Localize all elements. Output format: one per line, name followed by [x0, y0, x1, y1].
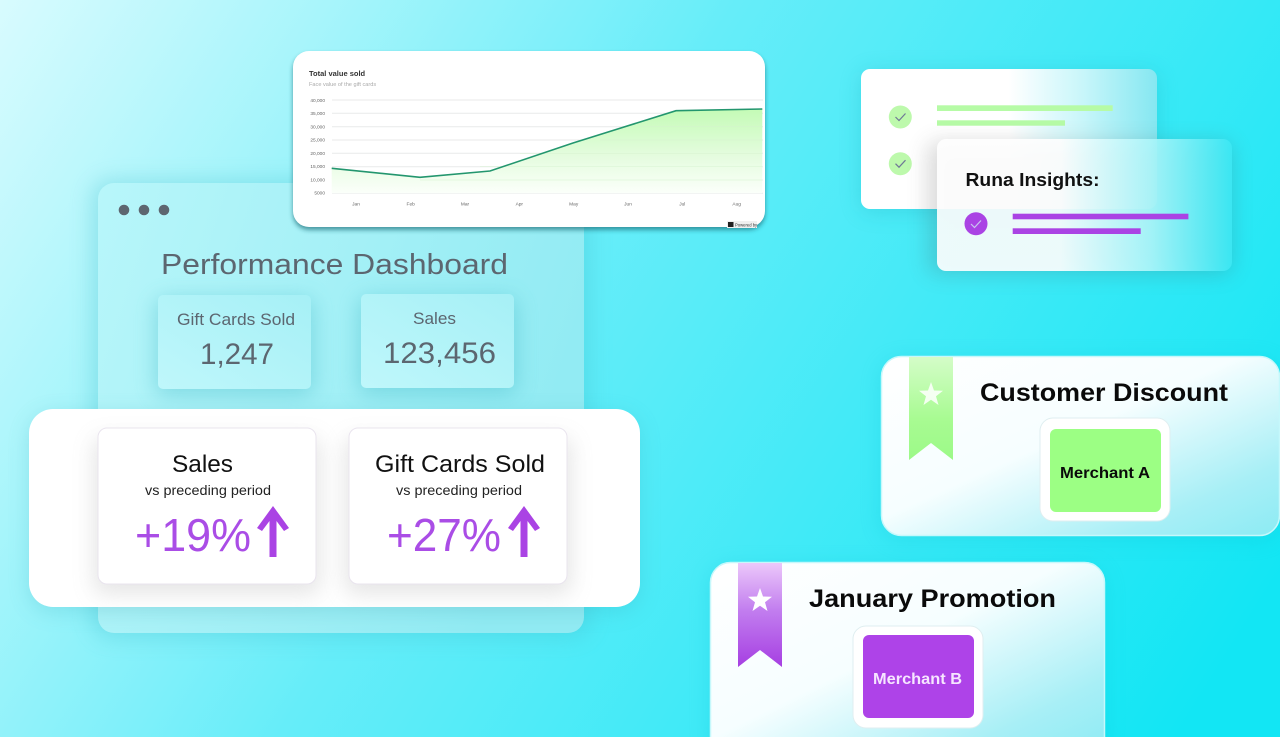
stat card: gift cards sold: 1,247	[200, 338, 274, 371]
panel: total value sold chart	[293, 51, 765, 230]
x axis labels: Apr	[516, 202, 523, 208]
panel: customer discount card	[881, 356, 1280, 540]
metric card: gift cards sold	[345, 428, 571, 594]
y axis labels: 40,000	[310, 98, 325, 104]
panel: comparison metrics	[29, 409, 640, 612]
x axis labels: Aug	[732, 202, 741, 208]
heading: runa insights: Runa Insights:	[966, 170, 1100, 190]
metric card: sales: Sales	[172, 451, 233, 478]
heading: customer discount: Customer Discount	[980, 379, 1229, 407]
metric card: sales: vs preceding period	[145, 483, 271, 498]
y axis labels: 30,000	[310, 124, 325, 130]
panel: checklist back card	[861, 69, 1157, 212]
icon: green check	[889, 106, 912, 128]
window control dots	[119, 205, 169, 215]
chart subtitle: Face value of the gift cards	[309, 82, 376, 88]
metric card: sales: +19%	[135, 509, 251, 561]
powered by badge	[727, 221, 758, 228]
gridlines	[332, 100, 763, 193]
chart title: Total value sold	[309, 69, 366, 78]
panel: january promotion card	[710, 562, 1105, 737]
metric card: gift cards sold: +27%	[387, 509, 501, 561]
metric card: sales	[94, 428, 320, 594]
icon: purple check	[964, 212, 988, 235]
green text placeholder bars	[937, 105, 1113, 126]
stat card: gift cards sold: Gift Cards Sold	[177, 310, 295, 329]
stat card: sales	[359, 294, 516, 394]
panel: performance dashboard window	[92, 180, 590, 638]
y axis labels	[310, 98, 325, 196]
y axis labels: 25,000	[310, 138, 325, 144]
x axis labels: Mar	[461, 202, 470, 208]
metric card: gift cards sold: Gift Cards Sold	[375, 451, 545, 478]
area under line	[332, 109, 762, 193]
merchant tile A	[1040, 418, 1170, 521]
stat card: sales: Sales	[413, 309, 456, 328]
powered by badge: Powered by	[735, 223, 758, 228]
stat card: gift cards sold	[156, 295, 313, 395]
heading: january promotion: January Promotion	[809, 585, 1056, 613]
x axis labels: Jun	[624, 202, 632, 208]
icon: up arrow	[508, 506, 540, 557]
y axis labels: 35,000	[310, 111, 325, 117]
ribbon badge: purple	[738, 563, 782, 667]
gridlines over area	[420, 127, 762, 180]
icon: green check 2	[889, 152, 912, 175]
merchant tile A: Merchant A	[1060, 465, 1150, 482]
x axis labels: Feb	[407, 202, 415, 208]
panel: runa insights card	[928, 139, 1232, 274]
x axis labels: Jan	[352, 202, 360, 208]
x axis labels: May	[569, 202, 579, 208]
y axis labels: 20,000	[310, 151, 325, 157]
y axis labels: 15,000	[310, 164, 325, 170]
x axis labels	[352, 202, 741, 208]
heading: performance dashboard: Performance Dashboard	[161, 249, 508, 281]
stat card: sales: 123,456	[383, 337, 496, 370]
chart line	[332, 109, 762, 177]
metric card: gift cards sold: vs preceding period	[396, 483, 522, 498]
ribbon badge: green	[909, 357, 953, 460]
purple text placeholder bars	[1013, 214, 1188, 234]
merchant tile B	[853, 626, 983, 728]
merchant tile B: Merchant B	[873, 671, 962, 688]
y axis labels: 10,000	[310, 178, 325, 184]
icon: up arrow	[257, 506, 289, 557]
y axis labels: 5000	[314, 190, 325, 196]
x axis labels: Jul	[679, 202, 685, 208]
